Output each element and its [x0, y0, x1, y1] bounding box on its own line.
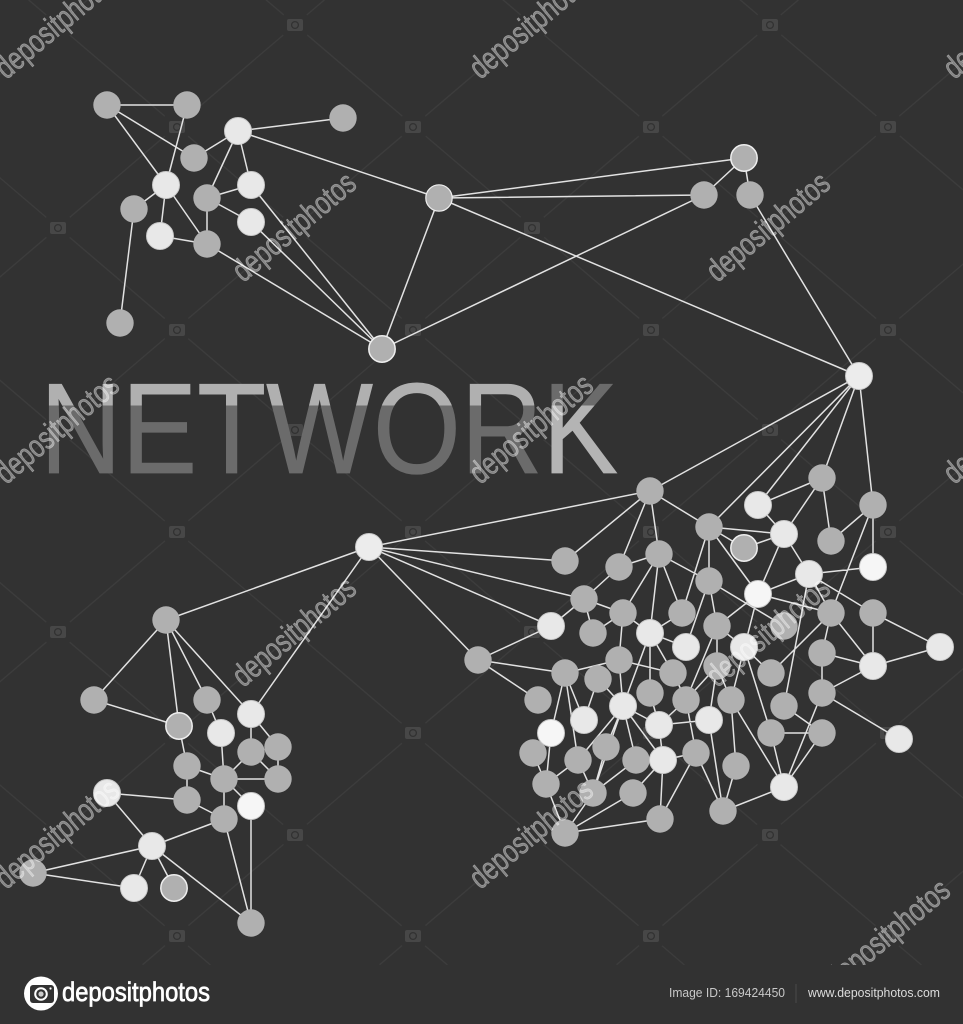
- title: NETWORK: NETWORK: [40, 357, 618, 501]
- nodes: lower-left cluster: [19, 606, 292, 937]
- icon: camera badge: [24, 976, 58, 1010]
- watermark text: depositphotos: [225, 164, 363, 288]
- watermark text: depositphotos: [462, 771, 600, 895]
- edges: hub links: [166, 547, 584, 714]
- nodes: hubs: [356, 362, 872, 674]
- watermark text: depositphotos: [699, 164, 837, 288]
- edges: lower-left cluster: [33, 620, 278, 923]
- logo wordmark: depositphotos: [62, 977, 210, 1007]
- edges: top cluster and long links: [107, 105, 859, 376]
- watermark text: depositphotos: [225, 569, 363, 693]
- website url: www.depositphotos.com: [807, 986, 940, 1000]
- watermark camera icons: [50, 19, 896, 942]
- footer logo: [24, 976, 210, 1010]
- edges: large lower-right cluster: [369, 376, 940, 833]
- watermark text: depositphotos: [462, 366, 600, 490]
- nodes: top cluster: [93, 91, 764, 362]
- watermark text: depositphotos: [699, 569, 837, 693]
- nodes: large lower-right cluster: [519, 464, 954, 847]
- image id: Image ID: 169424450: [669, 986, 785, 1000]
